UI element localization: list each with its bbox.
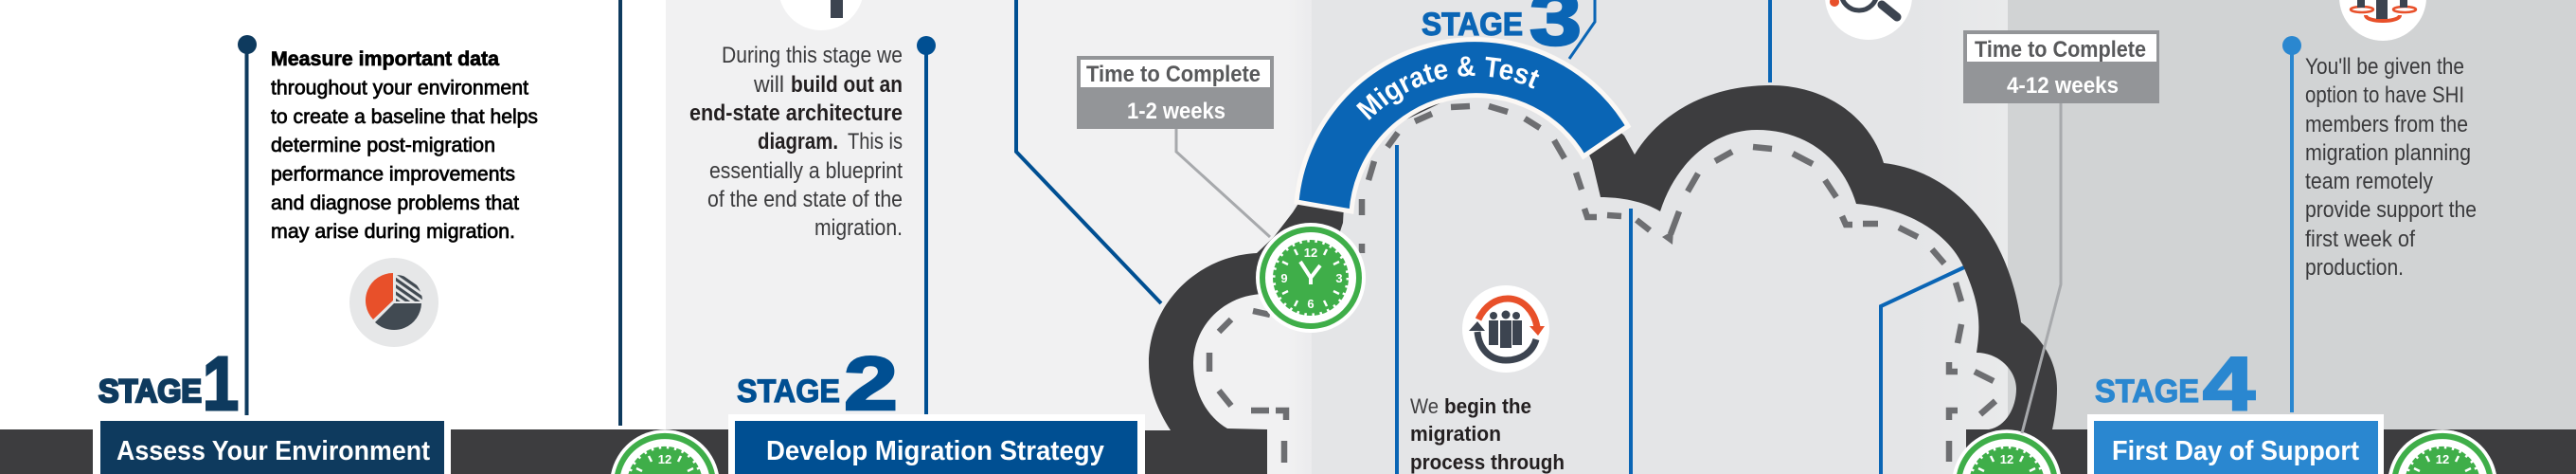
stage 2 description: will xyxy=(753,72,784,98)
stage 4 banner: First Day of Support xyxy=(2112,436,2359,466)
stage 1 description: performance improvements xyxy=(271,163,515,186)
cloud ring xyxy=(1145,59,2087,474)
dark timeline band xyxy=(0,429,2576,474)
icon: magnifier xyxy=(1825,0,1912,40)
stage 3 description: migration xyxy=(1410,422,1501,446)
clock: band after stage 4: 12 xyxy=(2436,452,2449,466)
icon: people cycle xyxy=(1462,285,1549,373)
stage 2 banner xyxy=(728,414,1145,474)
stage 2 description: migration. xyxy=(814,215,903,241)
time to complete callout: 4-12 weeks: Time to Complete xyxy=(1975,37,2146,63)
clock: band stage 3 to 4 xyxy=(1953,429,2061,474)
connector dots xyxy=(238,35,2301,55)
clock: stage 2 timing: 9 xyxy=(1280,271,1288,285)
stage 1 heading: 1 xyxy=(203,341,239,426)
time to complete callout: 1-2 weeks: Time to Complete xyxy=(1086,62,1261,87)
clock: stage 2 timing: 3 xyxy=(1335,271,1343,285)
stage 1 banner xyxy=(100,421,444,474)
stage 1 banner: Assess Your Environment xyxy=(116,436,430,466)
icon: stage 2 person xyxy=(778,0,864,30)
stage 1 description: throughout your environment xyxy=(271,78,528,99)
stage 2 heading: STAGE xyxy=(737,374,840,410)
time to complete callout: 1-2 weeks xyxy=(1077,56,1274,237)
dashed migration path xyxy=(1209,106,1995,463)
stage 4 description: migration planning xyxy=(2305,140,2471,166)
stage 3 description xyxy=(1410,394,1565,474)
stage 3 description: We xyxy=(1410,394,1439,418)
stage 2 description: essentially a blueprint xyxy=(709,158,903,184)
clock: band stage 1 to 2 xyxy=(611,429,719,474)
stage 3 heading xyxy=(1422,0,1582,61)
stage 4 description: members from the xyxy=(2305,112,2468,137)
stage 2 description: During this stage we xyxy=(722,43,903,68)
clock: stage 2 timing xyxy=(1256,223,1366,333)
stage 4 description: provide support the xyxy=(2305,197,2477,223)
icon: support team xyxy=(2339,0,2426,41)
stage 3 heading: STAGE xyxy=(1422,7,1523,43)
clock: stage 2 timing: 12 xyxy=(1304,246,1317,260)
stage 3 description: begin the xyxy=(1444,394,1531,418)
stage 1 description: to create a baseline that helps xyxy=(271,106,538,128)
stage 1 description: and diagnose problems that xyxy=(271,192,519,214)
stage 2 description: diagram. xyxy=(758,129,838,155)
clock: band stage 3 to 4: 12 xyxy=(2000,452,2013,466)
time to complete callout: 4-12 weeks: 4-12 weeks xyxy=(2007,73,2119,99)
stage 2 banner: Develop Migration Strategy xyxy=(766,436,1104,466)
stage 1 description: determine post-migration xyxy=(271,135,495,156)
stage 2 description: This is xyxy=(848,129,903,155)
stage 2 heading: 2 xyxy=(844,341,898,426)
stage 3 description: process through xyxy=(1410,450,1565,474)
stage 4 description: You'll be given the xyxy=(2305,54,2464,80)
stage 4 heading xyxy=(2095,341,2256,426)
stage 4 description xyxy=(2305,54,2477,281)
stage 4 description: team remotely xyxy=(2305,169,2433,194)
stage 4 heading: 4 xyxy=(2203,341,2256,426)
stage 2 heading xyxy=(737,341,898,426)
arc banner label: Migrate & Test xyxy=(1356,57,1540,120)
stage 1 heading xyxy=(98,341,239,426)
clock: stage 2 timing: 6 xyxy=(1307,297,1315,311)
stage 1 description: may arise during migration. xyxy=(271,221,515,243)
stage 4 description: production. xyxy=(2305,255,2404,281)
clock: band after stage 4 xyxy=(2388,429,2496,474)
clock: band stage 1 to 2: 12 xyxy=(658,452,671,466)
stage 4 banner xyxy=(2087,414,2384,474)
stage 4 heading: STAGE xyxy=(2095,374,2199,410)
icon: pie chart xyxy=(349,258,438,347)
connector lines xyxy=(246,0,2292,474)
stage 1 description: Measure important data xyxy=(271,48,499,70)
stage 2 description: of the end state of the xyxy=(707,187,903,212)
stage 2 description: build out an xyxy=(791,72,903,98)
dashed path corner marker xyxy=(1662,230,1673,245)
stage 1 description xyxy=(271,48,538,243)
stage 4 description: first week of xyxy=(2305,227,2415,252)
stage 2 description xyxy=(689,43,903,241)
stage 3 arc banner xyxy=(1294,37,1631,214)
time to complete callout: 1-2 weeks: 1-2 weeks xyxy=(1127,99,1225,124)
time to complete callout: 4-12 weeks xyxy=(1963,30,2159,433)
stage 4 description: option to have SHI xyxy=(2305,82,2464,108)
stage 1 heading: STAGE xyxy=(98,374,202,410)
stage 2 description: end-state architecture xyxy=(689,100,903,126)
